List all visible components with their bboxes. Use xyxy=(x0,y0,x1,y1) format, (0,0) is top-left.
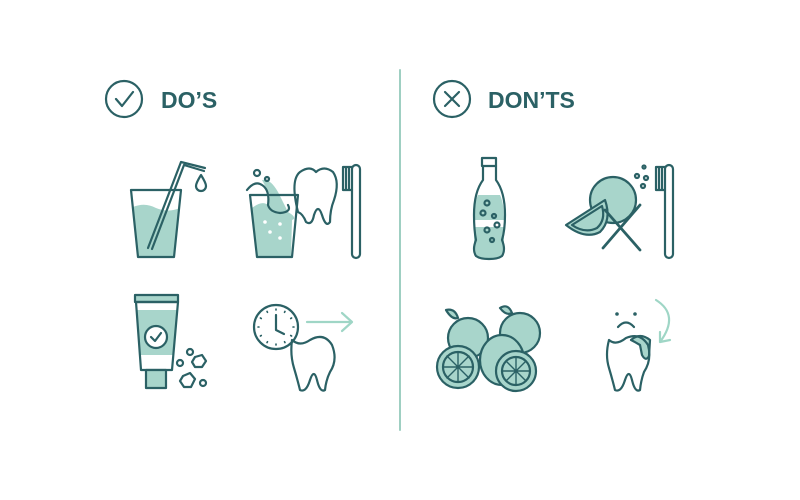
heading: donts: DON’TS xyxy=(488,87,575,113)
icon: toothpaste tube xyxy=(135,295,206,388)
icon: sad tooth with acid arrow xyxy=(607,300,670,391)
icon: lemon with cross and toothbrush xyxy=(566,165,673,258)
icon: citrus fruits xyxy=(437,306,540,391)
heading: dos: DO’S xyxy=(161,87,217,113)
heading: dos xyxy=(106,81,217,117)
icon: glass rinse, tooth, toothbrush xyxy=(247,165,360,258)
icon: soda bottle xyxy=(474,158,505,259)
heading: donts xyxy=(434,81,575,117)
icon: glass with straw xyxy=(131,162,206,257)
icon: clock and tooth with arrow xyxy=(254,305,352,391)
